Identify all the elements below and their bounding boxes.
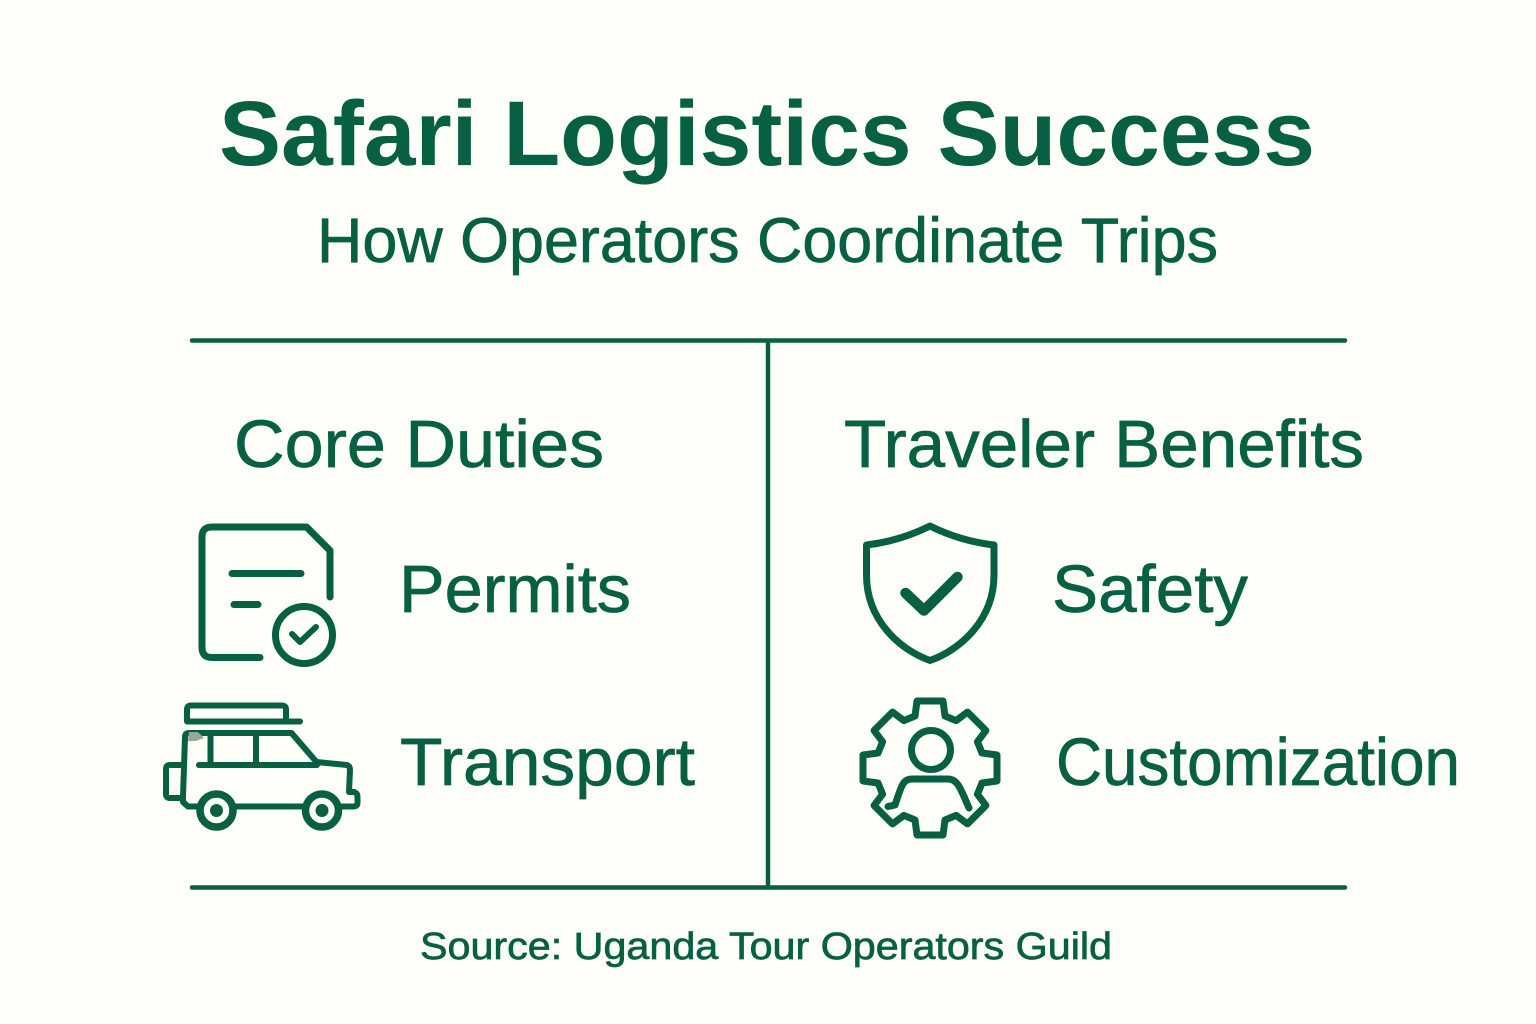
panel: core duties bbox=[166, 407, 695, 827]
heading: core duties: Core Duties bbox=[234, 407, 604, 482]
title: Safari Logistics Success bbox=[219, 83, 1315, 185]
source note: Source: Uganda Tour Operators Guild bbox=[420, 926, 1112, 968]
subtitle: How Operators Coordinate Trips bbox=[317, 206, 1218, 276]
icon: permit document with check bbox=[202, 527, 332, 664]
icon: gear with person bbox=[863, 701, 997, 835]
icon: shield with check bbox=[866, 526, 994, 660]
label: customization: Customization bbox=[1056, 725, 1460, 800]
label: safety: Safety bbox=[1052, 552, 1249, 627]
panel: traveler benefits bbox=[844, 407, 1460, 835]
label: transport: Transport bbox=[400, 725, 695, 800]
label: permits: Permits bbox=[399, 552, 631, 627]
heading: traveler benefits: Traveler Benefits bbox=[844, 407, 1364, 482]
icon: safari vehicle bbox=[166, 706, 358, 827]
